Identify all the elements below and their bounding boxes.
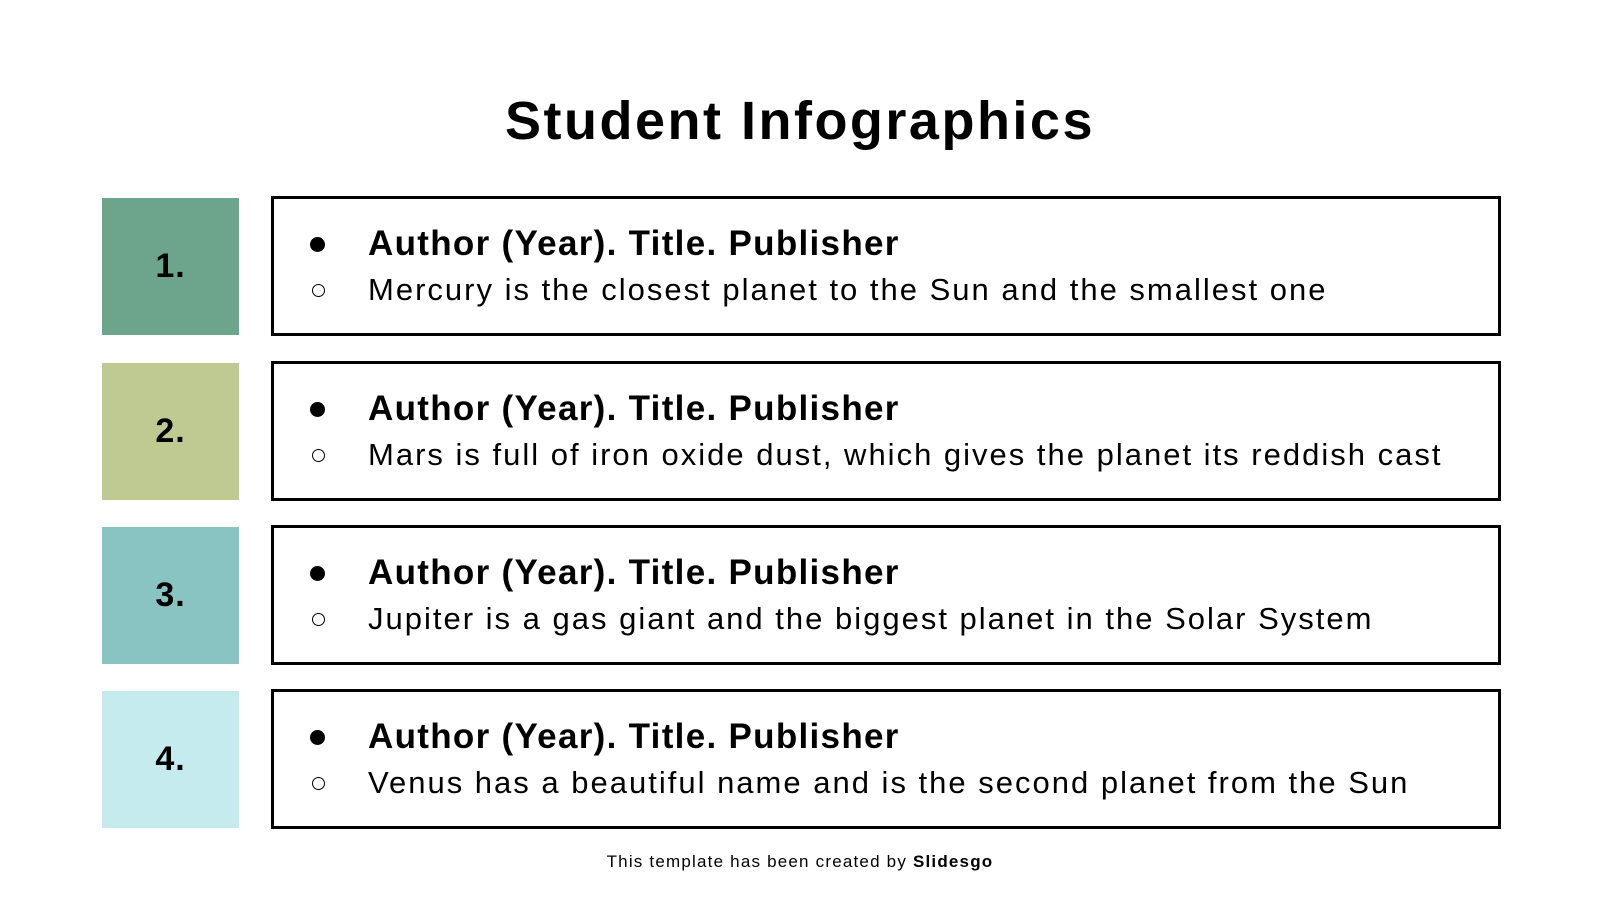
sub bullet [312,284,325,297]
heading: Author (Year). Title. Publisher [368,389,900,428]
sub bullet [312,613,325,626]
bullet [310,566,325,581]
panel: item 3 [271,525,1501,665]
heading: Author (Year). Title. Publisher [368,224,900,263]
number: 3 [102,527,239,664]
footer: This template has been created by Slidesgo [607,852,993,871]
number: 3: 3. [155,576,186,614]
text: Jupiter is a gas giant and the biggest planet in the Solar System [368,601,1373,636]
number: 1 [102,198,239,335]
sub bullet [312,777,325,790]
panel: item 1 [271,196,1501,336]
panel: item 2 [271,361,1501,501]
number: 4: 4. [155,740,186,778]
sub bullet [312,449,325,462]
bullet [310,402,325,417]
bullet [310,730,325,745]
title: Student Infographics [505,91,1095,151]
bullet [310,237,325,252]
number: 2: 2. [155,412,186,450]
number: 4 [102,691,239,828]
heading: Author (Year). Title. Publisher [368,553,900,592]
text: Mars is full of iron oxide dust, which gives the planet its reddish cast [368,437,1442,472]
text: Mercury is the closest planet to the Sun and the smallest one [368,272,1327,307]
number: 2 [102,363,239,500]
text: Venus has a beautiful name and is the second planet from the Sun [368,765,1409,800]
number: 1: 1. [155,247,186,285]
panel: item 4 [271,689,1501,829]
heading: Author (Year). Title. Publisher [368,717,900,756]
